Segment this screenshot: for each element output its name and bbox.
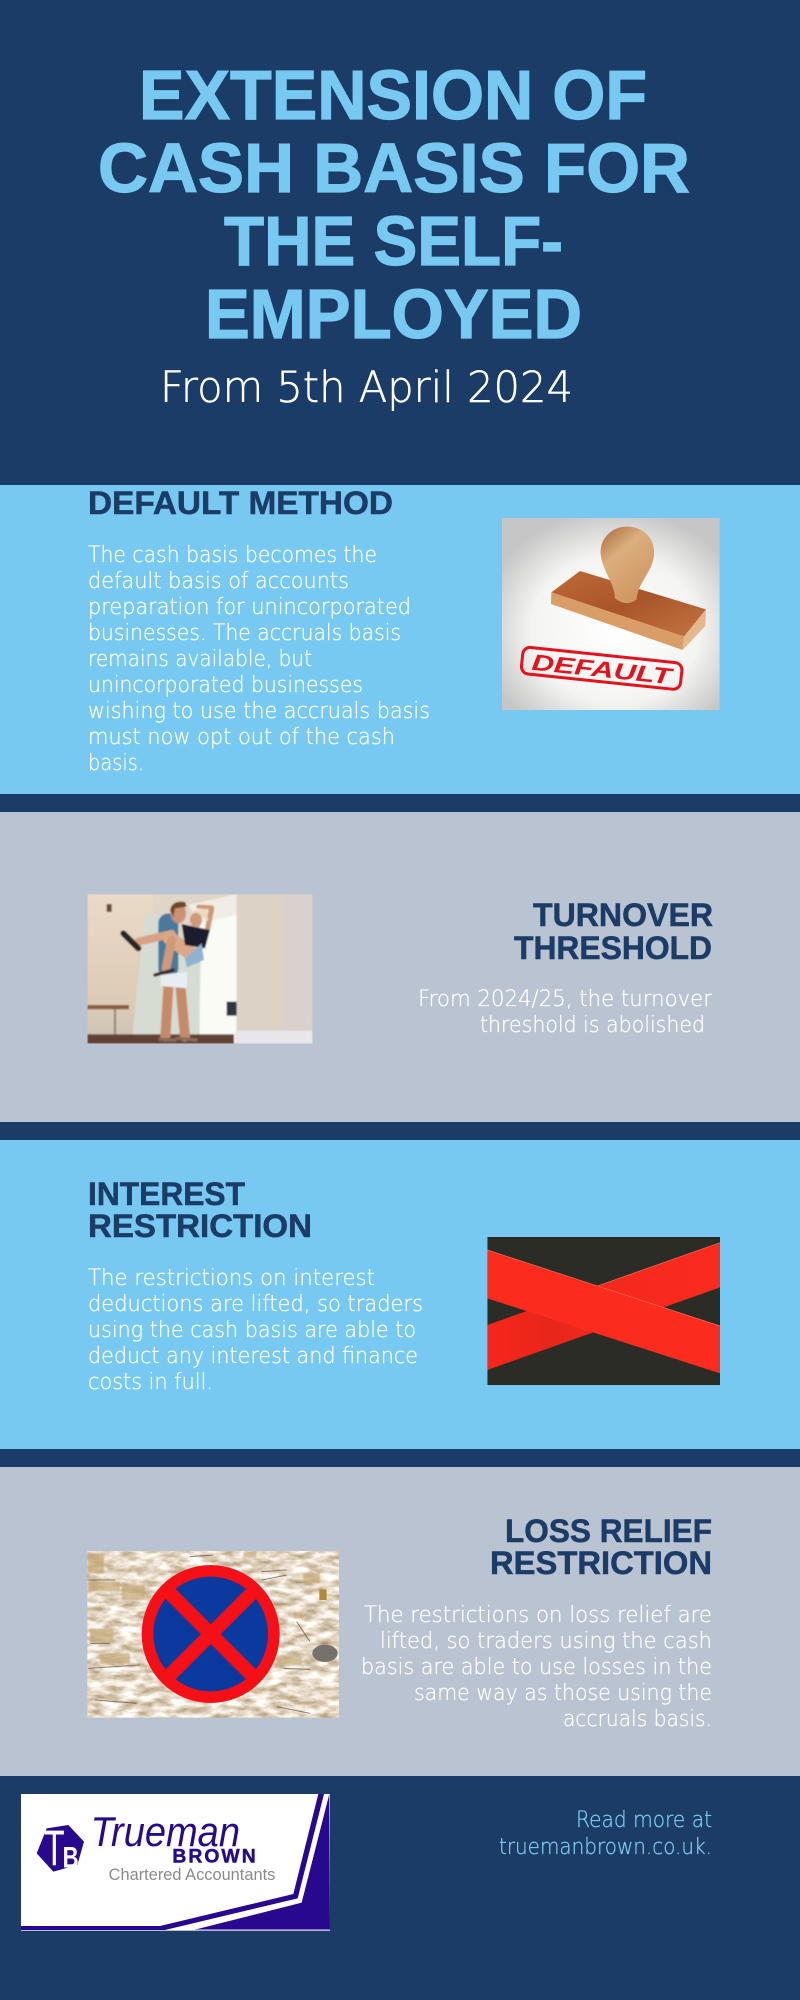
image: wooden default stamp	[502, 518, 720, 710]
text: default method body: unincorporated businesses	[88, 672, 363, 698]
panel: header	[0, 0, 800, 485]
image: crossed red ribbons	[487, 1237, 720, 1385]
heading: loss relief restriction	[490, 1513, 712, 1581]
text: default method body: businesses. The accruals basis	[88, 620, 401, 646]
heading: interest restriction: INTEREST	[88, 1176, 245, 1212]
title: THE SELF-	[224, 202, 563, 280]
text: default method body: preparation for unincorporated	[88, 594, 411, 620]
logo: Trueman Brown	[21, 1794, 330, 1931]
text: turnover body	[418, 986, 713, 1038]
text: interest body: costs in full.	[88, 1369, 213, 1395]
text: default method body: remains available, but	[88, 646, 312, 672]
title	[98, 56, 690, 353]
text: loss relief body	[361, 1602, 712, 1732]
text: default method body: default basis of accounts	[88, 568, 349, 594]
text: interest body: The restrictions on interest	[88, 1265, 375, 1291]
heading: interest restriction: RESTRICTION	[88, 1208, 312, 1244]
text: turnover body: From 2024/25, the turnover	[418, 986, 713, 1012]
text: interest body	[88, 1265, 423, 1395]
text: interest body: using the cash basis are able to	[88, 1317, 416, 1343]
divider band	[0, 1449, 800, 1467]
text: interest body: deductions are lifted, so traders	[88, 1291, 423, 1317]
sign	[142, 1565, 280, 1703]
logo hexagon emblem: B	[63, 1841, 79, 1874]
link text: Read more at	[576, 1807, 712, 1833]
text: default method body: basis.	[88, 750, 144, 776]
logo hexagon emblem: T	[44, 1820, 65, 1876]
image: couple in doorway	[87, 894, 313, 1044]
subtitle: From 5th April 2024	[160, 363, 573, 413]
text: default method body: wishing to use the accruals basis	[88, 698, 430, 724]
heading: interest restriction	[88, 1176, 312, 1244]
divider band	[0, 1122, 800, 1140]
text: default method body: The cash basis becomes the	[88, 542, 377, 568]
heading: default method: DEFAULT METHOD	[88, 485, 393, 521]
text: loss relief body: basis are able to use losses in the	[361, 1654, 712, 1680]
text: loss relief body: The restrictions on loss relief are	[364, 1602, 712, 1628]
heading: turnover threshold: THRESHOLD	[514, 930, 712, 966]
stamp mark	[521, 647, 683, 690]
panel: footer	[0, 1776, 800, 2000]
text: turnover body: threshold is abolished	[480, 1012, 705, 1038]
heading: loss relief restriction: RESTRICTION	[490, 1545, 712, 1581]
panel: default method	[0, 485, 800, 794]
logo: Trueman Brown: Trueman	[91, 1808, 240, 1855]
heading: loss relief restriction: LOSS RELIEF	[505, 1513, 712, 1549]
link text	[499, 1807, 712, 1860]
logo hexagon emblem	[37, 1820, 84, 1876]
text: loss relief body: accruals basis.	[563, 1706, 712, 1732]
text: loss relief body: lifted, so traders using the cash	[380, 1628, 712, 1654]
image: no-stopping sign on stone wall	[87, 1551, 339, 1718]
text: loss relief body: same way as those using the	[414, 1680, 712, 1706]
logo: Trueman Brown: BROWN	[172, 1847, 256, 1868]
heading: turnover threshold: TURNOVER	[533, 897, 713, 933]
text: interest body: deduct any interest and finance	[88, 1343, 418, 1369]
heading: turnover threshold	[514, 897, 713, 966]
text: default method body: must now opt out of the cash	[88, 724, 395, 750]
title: CASH BASIS FOR	[98, 129, 690, 207]
panel: loss relief restriction	[0, 1467, 800, 1776]
panel: interest restriction	[0, 1140, 800, 1449]
link text: truemanbrown.co.uk.	[499, 1834, 712, 1860]
logo: Trueman Brown: Chartered Accountants	[109, 1865, 275, 1884]
divider band	[0, 794, 800, 812]
stamp mark: DEFAULT	[531, 649, 675, 690]
text: default method body	[88, 542, 430, 776]
panel: turnover threshold	[0, 812, 800, 1122]
title: EXTENSION OF	[139, 56, 647, 134]
title: EMPLOYED	[205, 275, 582, 353]
